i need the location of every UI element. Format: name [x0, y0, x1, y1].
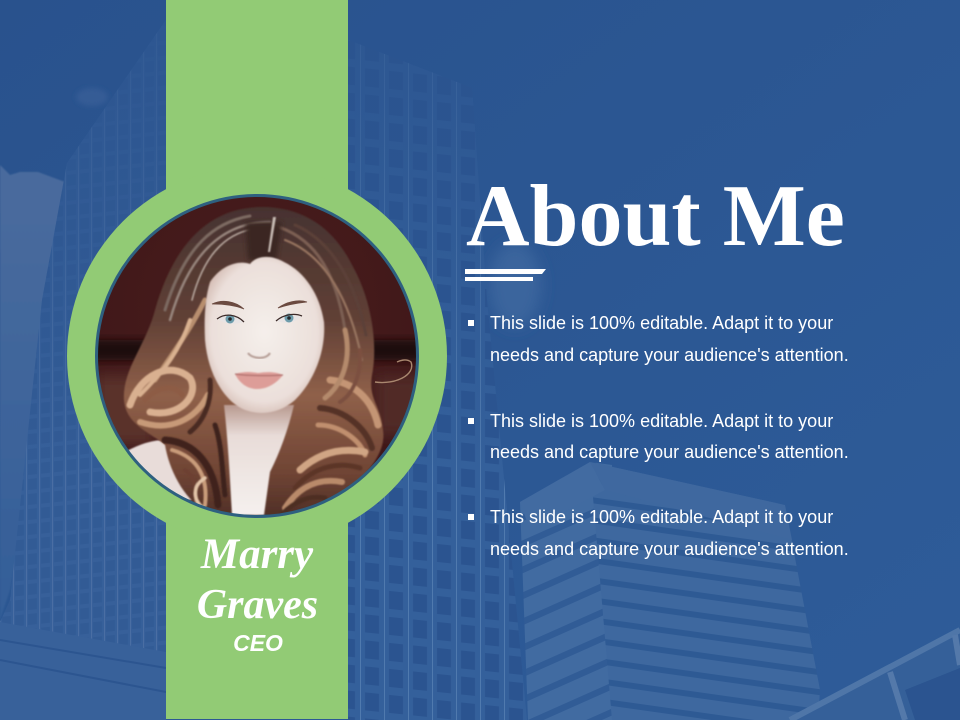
heading underline — [465, 269, 546, 281]
bullet 2: needs and capture your audience's attention. — [490, 442, 849, 462]
bullet 3: This slide is 100% editable. Adapt it to your — [490, 507, 833, 527]
bullet 1 — [468, 313, 849, 365]
name — [197, 531, 318, 628]
building: centre tower — [348, 40, 527, 720]
hair back mass — [124, 207, 383, 520]
first name: Marry — [200, 531, 314, 578]
flyaway hair strand — [375, 360, 412, 383]
cloud: faint upper — [76, 88, 108, 106]
job title: CEO — [233, 630, 283, 656]
shoulder left — [128, 440, 193, 501]
green ring around portrait — [67, 166, 447, 546]
bullet 2 — [468, 411, 849, 462]
portrait border — [96, 196, 418, 516]
hair strands — [130, 216, 378, 518]
bullet 3: needs and capture your audience's attention. — [490, 539, 849, 559]
lips — [235, 372, 283, 389]
eyebrows — [212, 301, 244, 309]
cloud: behind heading — [489, 243, 541, 327]
building: front tower — [520, 462, 820, 720]
heading: About Me — [466, 168, 845, 265]
bullet 1: This slide is 100% editable. Adapt it to your — [490, 313, 833, 333]
dark hair parting — [245, 222, 282, 262]
building: lower right roof — [790, 628, 960, 720]
building: left tower podium — [0, 622, 166, 720]
surname: Graves — [197, 582, 318, 628]
eye right — [276, 314, 302, 323]
bullet 1: needs and capture your audience's attention. — [490, 345, 849, 365]
red top — [318, 470, 346, 516]
photo background — [98, 197, 416, 502]
bullet list — [468, 313, 849, 559]
neck and chest — [224, 405, 294, 515]
portrait photo — [90, 190, 425, 525]
bullet 2: This slide is 100% editable. Adapt it to your — [490, 411, 833, 431]
eye left — [217, 314, 244, 324]
cloud: left — [0, 165, 65, 620]
nose — [248, 353, 270, 358]
face — [205, 257, 324, 413]
bullet 3 — [468, 507, 849, 559]
building: left tower — [0, 20, 166, 720]
green name band — [166, 0, 348, 719]
